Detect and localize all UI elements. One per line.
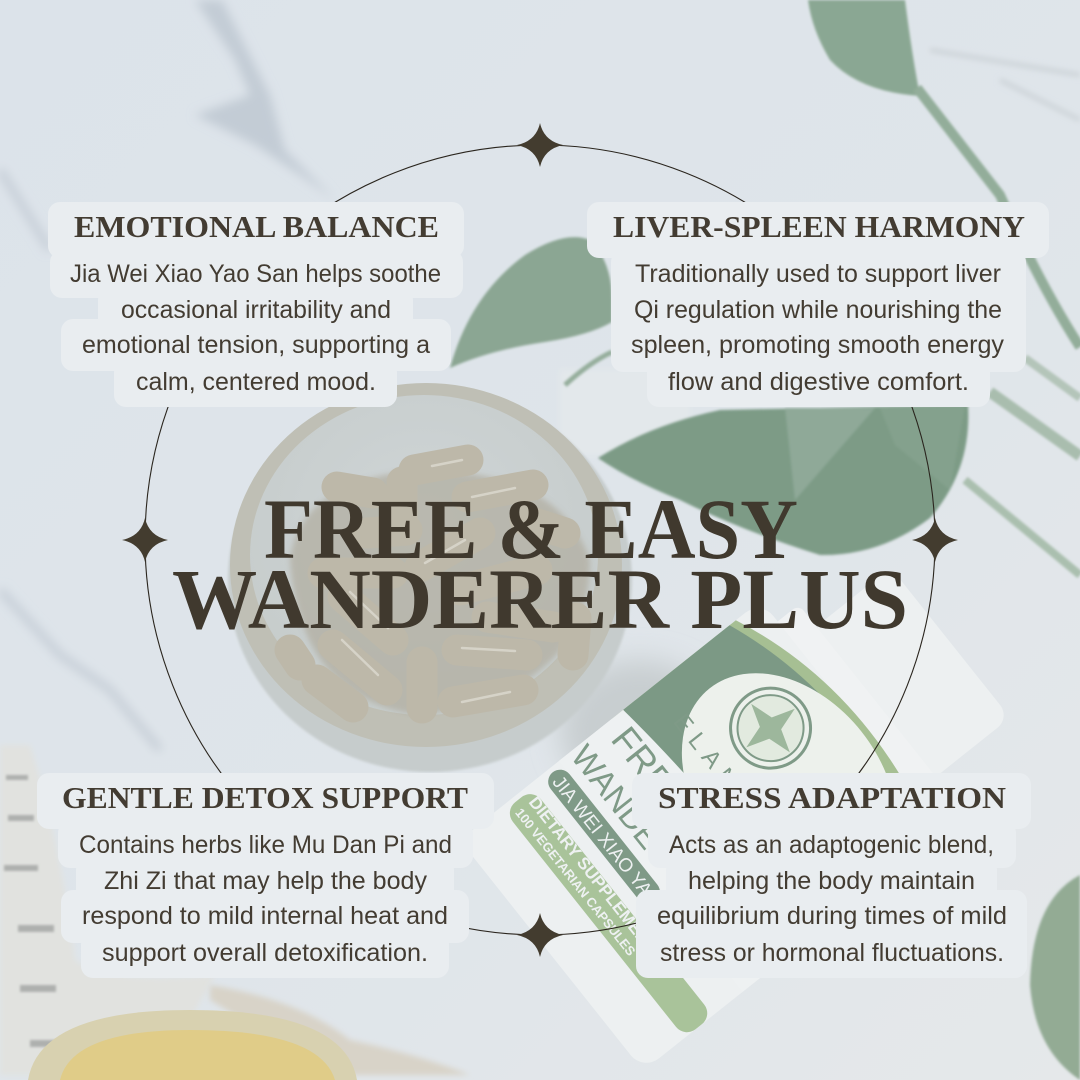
text: gentle detox body: respond to mild internal heat and [82, 902, 448, 930]
text: liver-spleen body: Traditionally used to support liver [635, 260, 1001, 288]
background photo: supplement bottle: ELAN [668, 709, 748, 800]
title: WANDERER PLUS [172, 551, 908, 647]
star: bottom [517, 913, 563, 957]
background photo: bowl of capsules [228, 383, 632, 772]
background photo: cloth, rope and candle [0, 745, 470, 1080]
text: emotional balance body [70, 260, 441, 396]
text: liver-spleen body: flow and digestive comfort. [668, 368, 969, 396]
text: gentle detox body: Contains herbs like Mu Dan Pi and [79, 831, 452, 859]
text: emotional balance body: occasional irritability and [121, 296, 391, 324]
background photo: leaves and stems [450, 0, 1080, 1080]
background photo: supplement bottle: WANDE [564, 738, 669, 856]
decorative circle with four stars [122, 123, 958, 957]
text: emotional balance body: emotional tension, supporting a [82, 331, 430, 359]
text: liver-spleen body [631, 260, 1005, 396]
panel: emotional balance [48, 202, 464, 407]
text: emotional balance body: Jia Wei Xiao Yao San helps soothe [70, 260, 441, 288]
text: stress adaptation body [657, 831, 1007, 967]
panel: liver-spleen harmony [587, 202, 1049, 407]
title: FREE & EASY [264, 481, 798, 577]
heading: liver-spleen harmony: LIVER-SPLEEN HARMONY [613, 209, 1025, 244]
heading: stress adaptation: STRESS ADAPTATION [658, 780, 1006, 815]
heading: emotional balance: EMOTIONAL BALANCE [74, 209, 439, 244]
text: stress adaptation body: equilibrium during times of mild [657, 902, 1007, 930]
text: liver-spleen body: Qi regulation while nourishing the [634, 296, 1002, 324]
text: gentle detox body [79, 831, 452, 967]
star: right [912, 518, 958, 562]
heading: gentle detox support: GENTLE DETOX SUPPORT [62, 780, 468, 815]
text: gentle detox body: Zhi Zi that may help the body [104, 867, 427, 895]
title [172, 481, 908, 647]
text: liver-spleen body: spleen, promoting smooth energy [631, 331, 1005, 359]
background photo: supplement bottle: FREE [604, 719, 697, 822]
text: gentle detox body: support overall detoxification. [102, 939, 428, 967]
star: top [517, 123, 563, 167]
text: emotional balance body: calm, centered mood. [136, 368, 376, 396]
star: left [122, 518, 168, 562]
background photo: supplement bottle: 100 VEGETARIAN CAPSULES [512, 805, 639, 959]
text: stress adaptation body: stress or hormonal fluctuations. [660, 939, 1004, 967]
panel: stress adaptation [632, 773, 1031, 978]
background photo: supplement bottle: JIA WEI XIAO YAO [548, 772, 665, 912]
background photo: supplement bottle: DIETARY SUPPLEMENT [525, 793, 660, 956]
text: stress adaptation body: Acts as an adaptogenic blend, [669, 831, 994, 859]
background photo: supplement bottle [460, 524, 1040, 1071]
text: stress adaptation body: helping the body maintain [688, 867, 975, 895]
panel: gentle detox support [37, 773, 494, 978]
